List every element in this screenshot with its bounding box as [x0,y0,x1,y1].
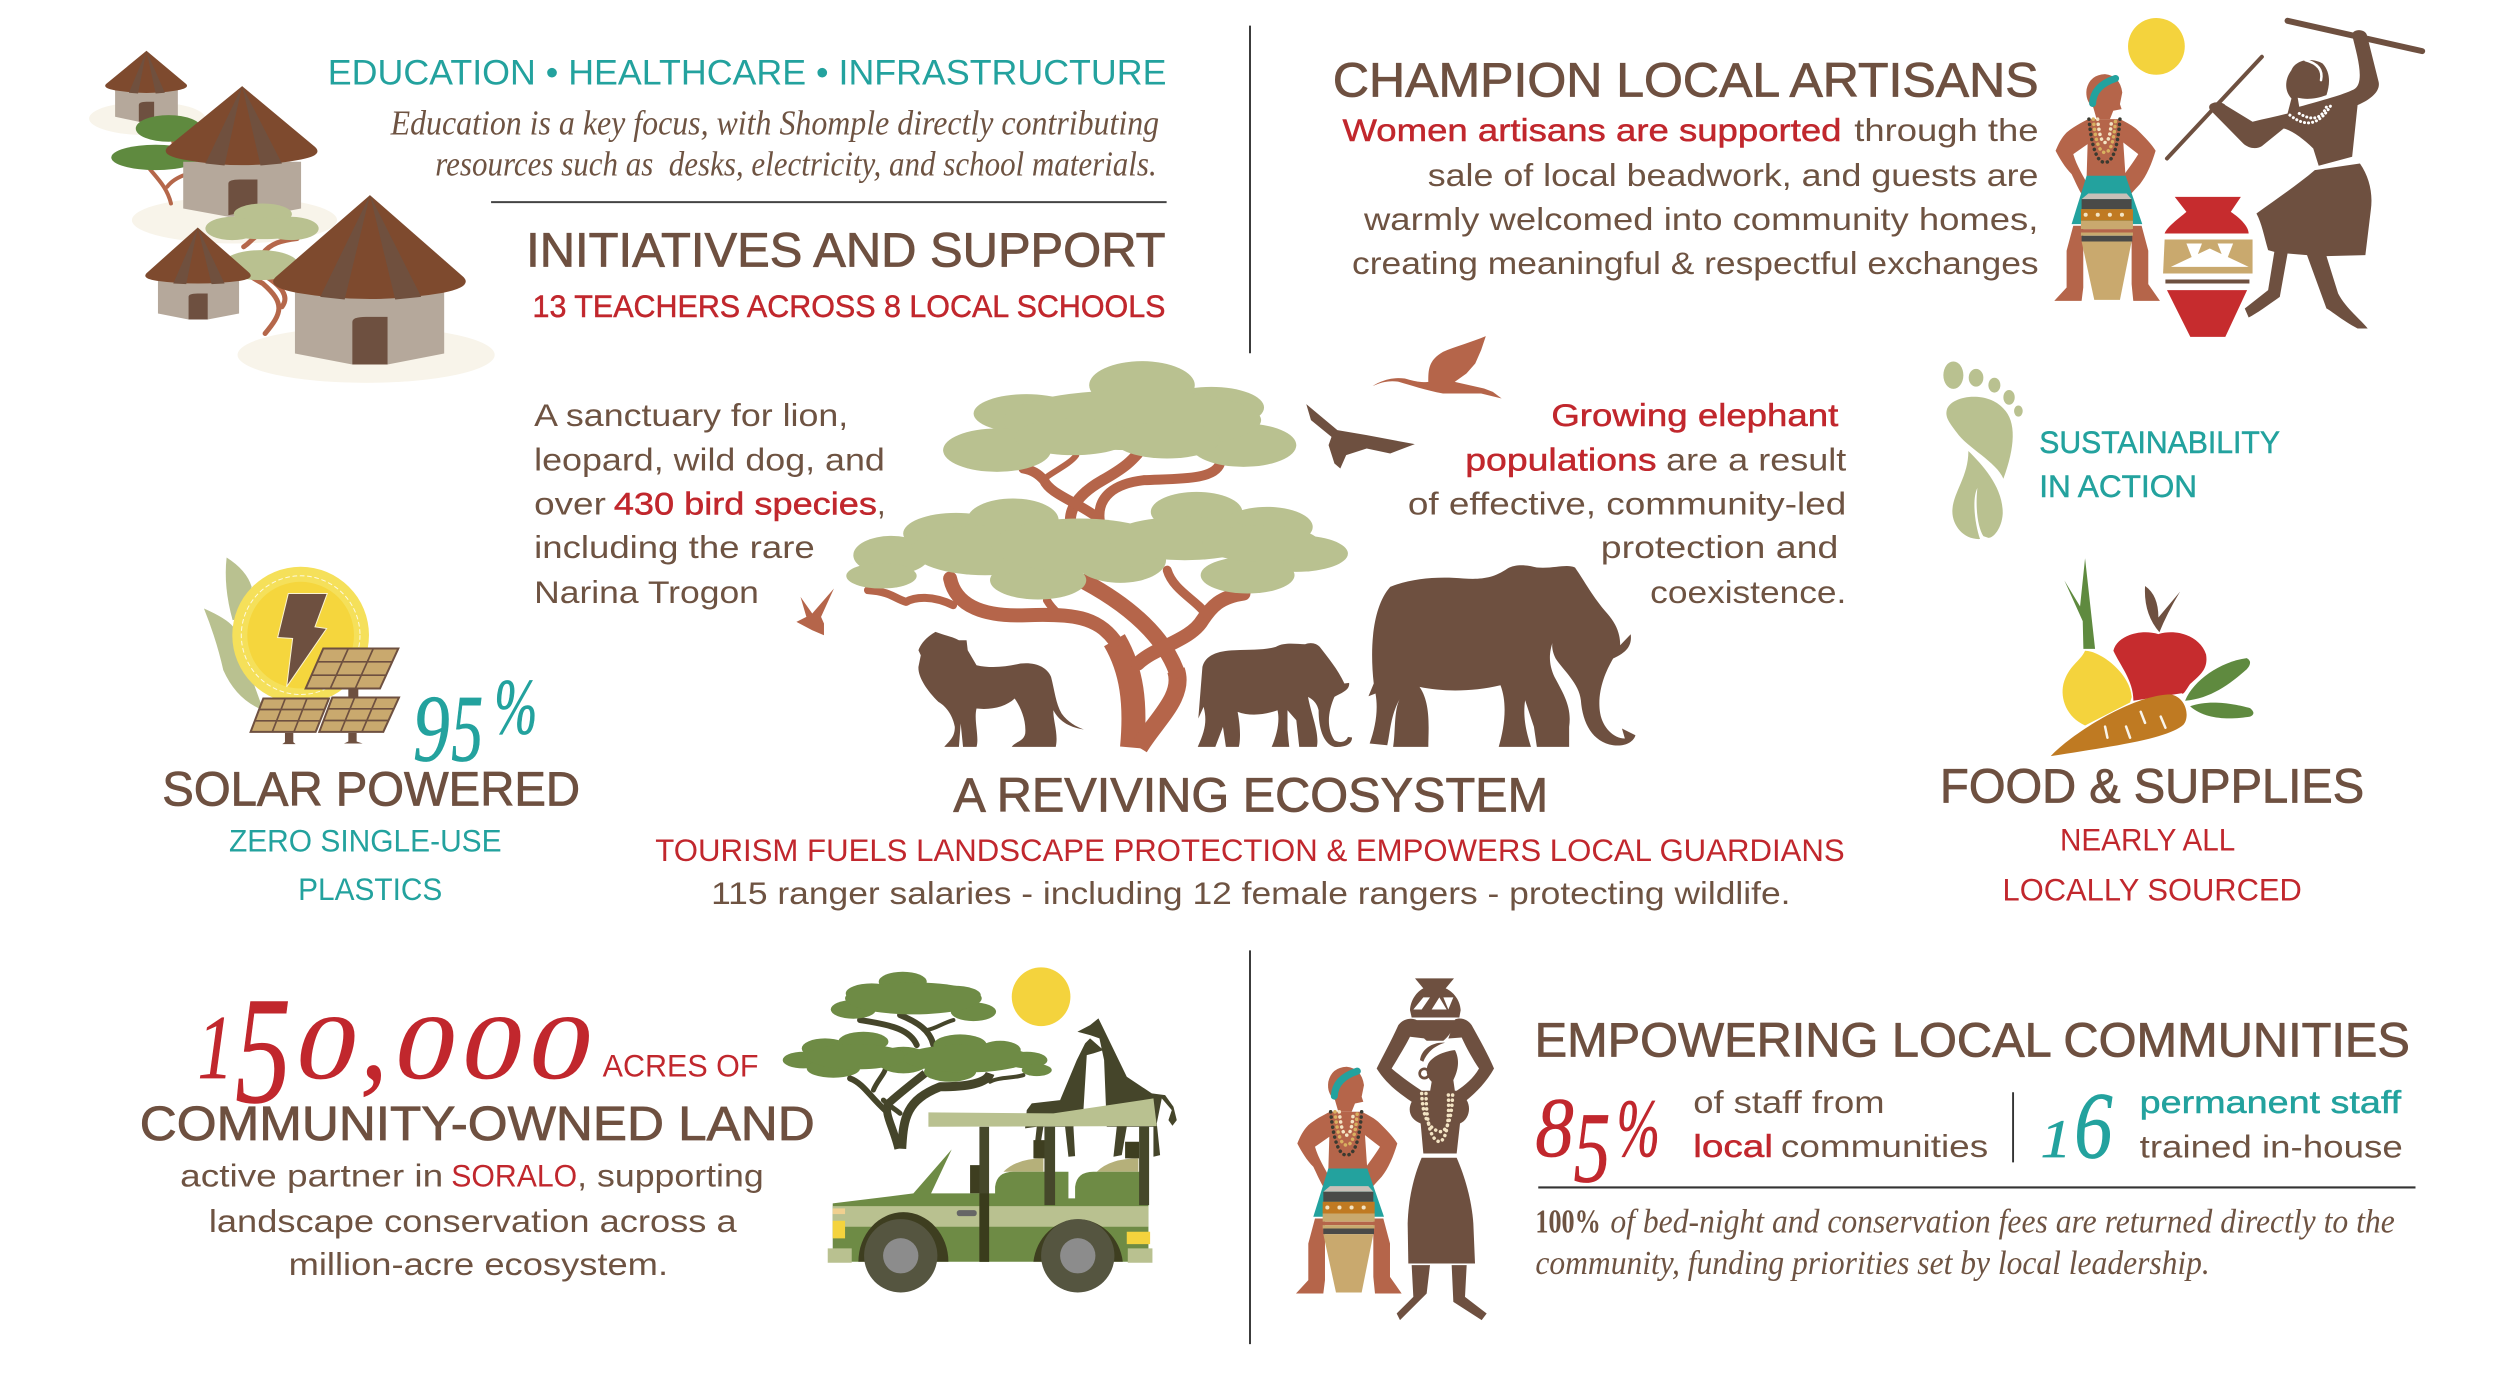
acres of: ACRES OF [603,1047,758,1083]
staff from local communities: local [1693,1128,1773,1164]
hut: large front [273,195,466,364]
teachers stat: 13 TEACHERS ACROSS 8 LOCAL SCHOOLS [533,289,1165,324]
text block: sanctuary description: over [534,485,606,521]
heading: food and supplies: FOOD & SUPPLIES [1940,760,2364,813]
tree: dark green acacia [111,115,225,203]
text block: elephant populations: are a result [1666,441,1846,477]
education description: Education is a key focus, with Shomple directly contributing [390,104,1159,143]
large elephant [1368,565,1635,747]
permanent staff: trained in-house [2140,1129,2403,1165]
stat: 95%: 5 [451,676,483,782]
stat: 16: 6 [2074,1073,2113,1179]
text block: a reviving ecosystem [655,770,1845,911]
artisans paragraph: warmly welcomed into community homes, [1363,201,2038,237]
soralo paragraph: , supporting [577,1157,764,1193]
tourism subheading: TOURISM FUELS LANDSCAPE PROTECTION & EMPOWERS LOCAL GUARDIANS [655,833,1845,868]
illustration: village huts and trees [89,51,495,383]
stat: 95%: % [494,664,537,752]
illustration: drummer and woman carrying pot [1296,978,1494,1320]
icon: solar panels with sun and leaves [204,557,399,744]
green acacia [783,972,1052,1149]
tagline: EDUCATION • HEALTHCARE • INFRASTRUCTURE [328,54,1166,93]
text block: sanctuary description: 430 bird species [614,485,877,521]
giraffes [1025,1018,1177,1157]
zero plastics note: ZERO SINGLE-USE [229,824,502,859]
soralo paragraph: million-acre ecosystem. [289,1246,668,1282]
education description: resources such as desks, electricity, and school materials. [435,144,1157,183]
stat: 150,000: 0 [529,997,590,1098]
text block: initiatives and support [328,54,1167,324]
hut: third [145,227,251,319]
text block: food and supplies [1940,760,2364,907]
stat: 150,000: 5 [235,967,291,1136]
text block: sanctuary description: , [877,485,886,521]
stat: 95%: 9 [413,676,450,782]
illustration: acacia tree, wildlife and birds [796,336,1635,748]
fees paragraph: 100% [1535,1203,1601,1241]
decorated red pot [2163,197,2253,337]
soralo paragraph: active partner in [180,1157,443,1193]
text block: sanctuary description: leopard, wild dog, and [534,441,885,477]
artisans paragraph: sale of local beadwork, and guests are [1428,157,2038,193]
fees paragraph: of bed-night and conservation fees are returned directly to the [1610,1203,2395,1241]
artisans paragraph: Women artisans are supported [1342,112,1842,148]
stat: 150,000: , [360,971,387,1105]
lion [918,632,1084,747]
heading: initiatives and support: INITIATIVES AND SUPPORT [526,224,1165,277]
zero plastics note: PLASTICS [298,872,442,907]
stat: 150,000: 0 [462,997,521,1098]
text block: elephant populations: coexistence. [1650,574,1846,610]
tree: pale green acacia [205,203,319,333]
text block: solar powered [162,763,580,907]
hut: second [166,86,317,217]
acacia tree [846,361,1348,748]
safari vehicle [828,1098,1157,1292]
text block: empowering local communities [1535,1015,2415,1282]
staff from local communities: of staff from [1693,1084,1885,1120]
text: sustainability in action: IN ACTION [2039,469,2197,504]
locally sourced note: NEARLY ALL [2060,823,2235,858]
seated drummer: artisans [2054,74,2160,301]
artisans paragraph: through the [1854,112,2039,148]
text block: elephant populations: protection and [1601,529,1838,565]
text block: champion local artisans [0,0,2083,281]
stat: 150,000: 0 [395,997,454,1098]
heading: empowering local communities: EMPOWERING LOCAL COMMUNITIES [1535,1015,2410,1068]
text block: elephant populations: Growing elephant [1551,397,1838,433]
stat: 85%: % [1617,1082,1660,1174]
sun [2128,18,2185,75]
staff from local communities: communities [1781,1128,1988,1164]
stat: 16: 1 [2041,1109,2071,1169]
woman with pot [1377,978,1494,1320]
text: sustainability in action: SUSTAINABILITY [2039,425,2280,460]
locally sourced note: LOCALLY SOURCED [2003,872,2302,907]
icon: food produce [2051,558,2253,756]
text block: elephant populations: of effective, community-led [1408,485,1846,521]
text block: sanctuary description: Narina Trogon [534,574,759,610]
stat: 150,000: 0 [297,997,356,1098]
text block: community-owned land [0,0,815,1282]
text block: sanctuary description: including the rare [534,529,815,565]
dancer with spear [2167,21,2422,329]
sun [1012,967,1070,1026]
bird: ibis in flight [1373,336,1502,398]
bird: small trogon [796,589,834,635]
text block: sanctuary description: A sanctuary for lion, [534,397,848,433]
illustration: safari vehicle, acacia, giraffes and sun [783,967,1177,1292]
permanent staff: permanent staff [2140,1084,2401,1120]
soralo paragraph: landscape conservation across a [209,1203,737,1239]
heading: champion local artisans: CHAMPION LOCAL ARTISANS [1333,55,2039,108]
illustration: artisans with drum, pot and spear [2054,18,2422,337]
artisans paragraph: creating meaningful & respectful exchanges [1352,245,2039,281]
fees paragraph: community, funding priorities set by local leadership. [1535,1244,2210,1282]
stat: 150,000: 1 [198,997,233,1098]
soralo paragraph: SORALO [451,1157,577,1193]
heading: solar powered: SOLAR POWERED [162,763,580,816]
heading: community-owned land: COMMUNITY-OWNED LAND [140,1098,815,1151]
heading: a reviving ecosystem: A REVIVING ECOSYSTEM [953,770,1548,823]
hut: top small [105,51,187,122]
stat: 85%: 8 [1535,1082,1574,1175]
stat: 85%: 5 [1574,1092,1610,1204]
seated drummer [1296,1067,1402,1293]
icon: footprint leaf [1943,361,2023,539]
small elephant [1198,643,1352,747]
bird: dark crane [1306,404,1415,469]
text block: elephant populations: populations [1465,441,1657,477]
ranger salaries line: 115 ranger salaries - including 12 female rangers - protecting wildlife. [711,875,1790,911]
